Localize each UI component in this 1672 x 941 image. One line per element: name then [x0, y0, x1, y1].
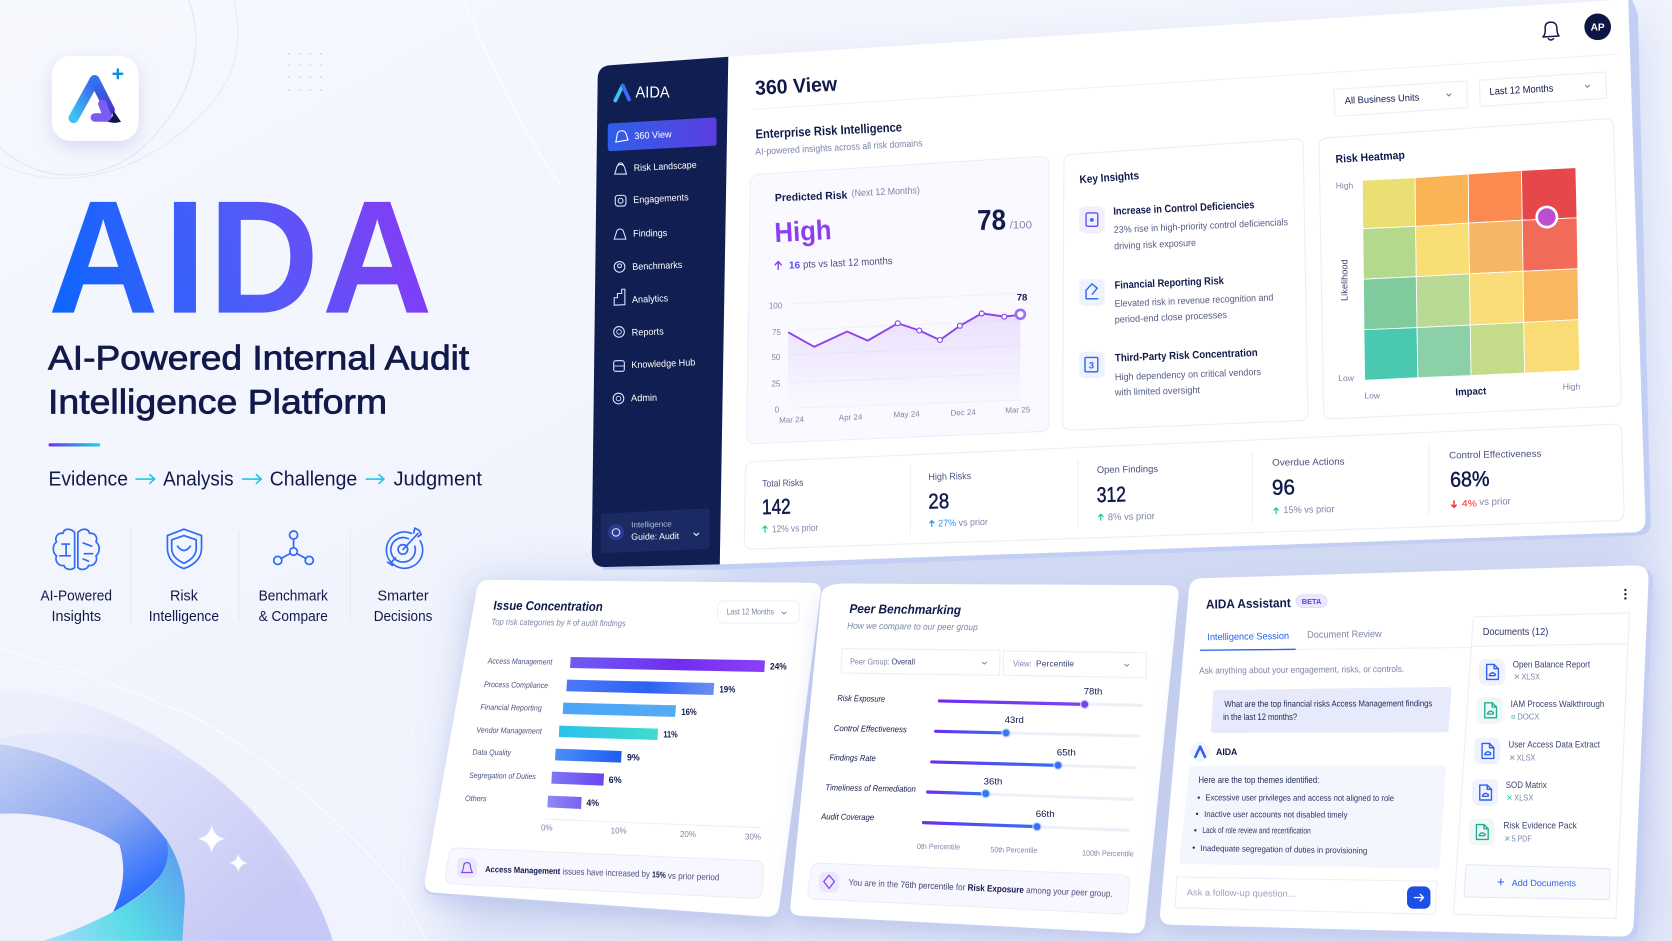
insight 3: High dependency on critical vendors — [1115, 367, 1261, 383]
section heading: AI-powered insights across all risk domains — [755, 138, 923, 158]
doc item 2: DOCX — [1517, 712, 1540, 721]
feature: AI-powered insights: Insights — [51, 609, 101, 625]
section heading — [755, 119, 923, 158]
KPI: high risks: vs prior — [958, 517, 989, 529]
feature: AI-powered insights — [41, 529, 112, 625]
active nav item — [610, 120, 714, 148]
percentile sliders: 78th — [1084, 686, 1102, 697]
percentile sliders: 66th — [1036, 809, 1055, 820]
doc item 3: ✕ — [1509, 753, 1516, 762]
tabs — [1200, 629, 1472, 650]
question input: Ask a follow-up question... — [1187, 887, 1296, 899]
percentile sliders: 100th Percentile — [1082, 849, 1134, 858]
line chart: Mar 25 — [1005, 405, 1031, 415]
percentile sliders: 65th — [1057, 747, 1076, 758]
insight 3: Third-Party Risk Concentration — [1115, 347, 1258, 364]
add documents button — [1464, 865, 1610, 900]
line chart: May 24 — [893, 409, 920, 419]
bar chart: Vendor Management — [476, 726, 542, 736]
dropdown: peer group — [841, 649, 1000, 675]
KPI: high risks: 28 — [928, 489, 949, 514]
bar chart: 30% — [745, 832, 761, 841]
subtitle: Intelligence Platform — [48, 383, 387, 421]
dropdown: period: Last 12 Months — [1489, 83, 1554, 98]
doc item 1: Open Balance Report — [1513, 660, 1591, 670]
bar chart: Access Management — [487, 656, 553, 667]
insight 2 — [1079, 275, 1274, 326]
callout: issues have increased by — [562, 866, 650, 879]
KPI: overdue actions: 15% vs prior — [1283, 504, 1335, 516]
panel: 360 view dashboard — [592, 0, 1651, 570]
line chart: Mar 24 — [779, 415, 805, 425]
documents list: Documents (12) — [1483, 627, 1548, 638]
KPI: high risks: High Risks — [928, 471, 971, 483]
nav items: Analytics — [632, 293, 669, 306]
percentile sliders: Timeliness of Remediation — [825, 782, 916, 794]
AIDA label: AIDA — [1216, 747, 1237, 758]
callout: vs prior period — [668, 871, 720, 882]
percentile sliders: Findings Rate — [829, 752, 876, 763]
card: key insights: Key Insights — [1079, 170, 1140, 186]
assistant answer: Inadequate segregation of duties in provisioning — [1200, 843, 1368, 856]
KPI: high risks: 27% — [938, 518, 957, 529]
icon: bell — [1543, 22, 1559, 40]
KPI: overdue actions: Overdue Actions — [1272, 457, 1345, 469]
sidebar logo — [615, 85, 670, 102]
feature: benchmark and compare: Benchmark — [259, 589, 329, 605]
percentile sliders: 36th — [984, 777, 1002, 788]
card: risk heatmap — [1319, 119, 1621, 419]
KPI: high risks — [928, 471, 989, 529]
beta badge — [1296, 595, 1327, 608]
KPI: overdue actions — [1272, 457, 1345, 516]
percentile sliders: 50th Percentile — [990, 845, 1037, 855]
callout: You are in the 76th percentile for Risk Exposure among your peer group. — [848, 877, 1113, 899]
intelligence guide box: Guide: Audit — [631, 531, 680, 542]
dropdown: view — [1003, 651, 1147, 678]
percentile sliders: Audit Coverage — [820, 811, 874, 822]
line chart: 25 — [771, 379, 781, 388]
nav items: Findings — [633, 228, 668, 240]
doc item 2: ¤ — [1511, 712, 1515, 721]
risk score: 78 — [977, 205, 1006, 237]
panel: issue concentration: Issue Concentration — [493, 598, 603, 614]
dropdown: business units — [1334, 81, 1467, 116]
card: predicted risk: Predicted Risk — [775, 190, 848, 204]
bar chart: 24% — [770, 662, 787, 673]
KPI: open findings: Open Findings — [1097, 464, 1158, 476]
dropdown: peer group: Overall — [891, 656, 915, 666]
assistant answer: Inactive user accounts not disabled timely — [1204, 809, 1348, 820]
risk level: High — [774, 214, 832, 248]
percentile sliders: 0th Percentile — [917, 842, 960, 852]
AIDA label — [1190, 742, 1237, 762]
decorative arcs top-left — [0, 0, 560, 184]
line chart: 75 — [772, 328, 781, 337]
doc item 5 — [1469, 819, 1577, 845]
card: predicted risk: (Next 12 Months) — [851, 185, 920, 199]
nav items — [613, 160, 697, 404]
doc item 5: ✕ — [1504, 834, 1511, 843]
bar chart: Others — [465, 794, 487, 803]
feature: risk intelligence — [149, 529, 219, 625]
active nav item: 360 View — [634, 129, 672, 142]
heatmap grid — [1362, 168, 1580, 380]
line chart: 0 — [775, 406, 780, 415]
bar chart: 4% — [586, 798, 600, 809]
flow: evidence to judgment: Challenge — [270, 468, 357, 490]
heatmap axes: High — [1336, 181, 1354, 191]
percentile sliders: Risk Exposure — [837, 693, 885, 704]
insight 3: with limited oversight — [1114, 385, 1201, 399]
insight 2: Financial Reporting Risk — [1114, 275, 1224, 292]
dropdown — [718, 601, 799, 623]
doc item 3: User Access Data Extract — [1508, 739, 1601, 749]
KPI: control effectiveness — [1449, 449, 1542, 510]
percentile sliders — [820, 686, 1142, 858]
insight 2: Elevated risk in revenue recognition and — [1114, 292, 1274, 310]
bar chart — [465, 656, 787, 841]
sidebar — [592, 57, 728, 567]
feature: benchmark and compare: & Compare — [259, 609, 328, 625]
card: predicted risk — [747, 156, 1049, 444]
percentile sliders: Control Effectiveness — [834, 723, 907, 734]
card: KPI strip — [744, 424, 1624, 549]
doc item 2: IAM Process Walkthrough — [1511, 699, 1605, 709]
callout: 15% — [652, 869, 666, 880]
doc item 4: ✕ — [1506, 794, 1513, 803]
KPI: control effectiveness: Control Effectiveness — [1449, 449, 1542, 461]
bar chart: 20% — [680, 830, 696, 839]
nav items: Admin — [631, 393, 657, 404]
line chart: Dec 24 — [950, 408, 977, 418]
trend — [775, 256, 893, 272]
line chart: Apr 24 — [839, 413, 863, 422]
doc item 3: XLSX — [1517, 753, 1536, 762]
beta badge: BETA — [1302, 597, 1322, 606]
feature: risk intelligence: Intelligence — [149, 609, 219, 625]
nav items: Risk Landscape — [634, 160, 697, 174]
swirl graphic bottom-left — [0, 649, 427, 941]
risk score — [977, 205, 1032, 237]
insight 3 — [1079, 347, 1261, 399]
line chart — [769, 293, 1031, 425]
insight 1: 23% rise in high-priority control deficiencials — [1114, 217, 1288, 236]
avatar — [1584, 13, 1611, 40]
dropdown: period — [1479, 72, 1607, 106]
assistant answer: Excessive user privileges and access not aligned to role — [1205, 792, 1394, 803]
nav items: Benchmarks — [632, 260, 683, 273]
bar chart: 6% — [609, 775, 622, 786]
accent line — [49, 443, 100, 447]
doc item 5: 5 PDF — [1512, 834, 1532, 843]
section heading: Enterprise Risk Intelligence — [755, 119, 902, 141]
insight 2: period-end close processes — [1114, 310, 1227, 326]
KPI: open findings: 8% vs prior — [1108, 511, 1156, 523]
assistant answer: Lack of role review and recertification — [1202, 825, 1311, 836]
sidebar logo: AIDA — [636, 85, 670, 102]
risk score: /100 — [1010, 219, 1032, 231]
intelligence guide box: Intelligence — [631, 519, 672, 530]
panel: peer benchmarking: Peer Benchmarking — [849, 601, 961, 617]
callout: Access Management — [485, 864, 561, 876]
feature: smarter decisions: Smarter — [378, 589, 429, 605]
trend: 16 — [789, 261, 800, 272]
assistant answer: Here are the top themes identified: — [1198, 775, 1319, 785]
bar chart: Process Compliance — [484, 680, 549, 690]
feature: risk intelligence: Risk — [170, 589, 199, 605]
flow: evidence to judgment: Judgment — [393, 468, 482, 490]
flow: evidence to judgment: Evidence — [49, 468, 128, 490]
panel: AIDA assistant: AIDA Assistant — [1206, 595, 1292, 612]
dropdown: business units: All Business Units — [1344, 92, 1420, 107]
tabs: Intelligence Session — [1207, 631, 1289, 643]
callout — [446, 848, 764, 898]
KPI: total risks: 12% vs prior — [772, 523, 819, 535]
add documents button: Add Documents — [1512, 878, 1577, 888]
overflow menu — [1624, 589, 1627, 600]
heatmap axes: Likelihood — [1339, 259, 1350, 301]
bar chart: 11% — [663, 730, 678, 741]
soft shadow band — [448, 22, 1655, 939]
insight 3: 3 — [1089, 361, 1094, 372]
insight 1 — [1079, 199, 1288, 252]
flow: evidence to judgment: Analysis — [163, 468, 234, 490]
dropdown: view: Percentile — [1036, 658, 1074, 668]
KPI: total risks: 142 — [762, 494, 791, 519]
user bubble: in the last 12 months? — [1223, 712, 1297, 722]
bar chart: 10% — [611, 827, 627, 836]
intelligence guide box — [604, 511, 707, 550]
doc item 4 — [1472, 779, 1547, 806]
dropdown: peer group: Peer Group: — [850, 656, 890, 666]
insight 1: driving risk exposure — [1114, 238, 1196, 252]
panel: peer benchmarking: How we compare to our peer group — [847, 621, 978, 632]
heatmap axes: High — [1563, 381, 1580, 391]
line chart: 100 — [769, 301, 783, 310]
line chart: 50 — [771, 353, 781, 362]
KPI: control effectiveness: vs prior — [1479, 496, 1512, 508]
heatmap axes: Low — [1338, 373, 1355, 383]
nav items: Reports — [632, 326, 664, 339]
bar chart: Segregation of Duties — [469, 771, 536, 781]
percentile sliders: 43rd — [1005, 715, 1024, 726]
doc item 1 — [1479, 659, 1591, 685]
user bubble: What are the top financial risks Access Management findings — [1224, 698, 1433, 709]
avatar: AP — [1591, 23, 1605, 34]
bar chart: 16% — [681, 707, 697, 718]
question input — [1175, 877, 1437, 914]
nav items: Knowledge Hub — [631, 357, 696, 371]
dropdown: view: View: — [1013, 658, 1032, 668]
feature dividers — [131, 530, 350, 621]
heading: 360 View: 360 View — [754, 74, 838, 100]
doc item 4: SOD Matrix — [1506, 780, 1547, 790]
KPI: overdue actions: 96 — [1272, 475, 1295, 500]
logo tile — [52, 56, 139, 141]
feature: AI-powered insights: AI-Powered — [41, 589, 112, 605]
panel: AIDA assistant — [1160, 565, 1653, 941]
panel: issue concentration: Top risk categories by # of audit findings — [491, 617, 626, 628]
insight 1: Increase in Control Deficiencies — [1113, 199, 1255, 218]
tabs: Document Review — [1307, 629, 1382, 641]
panel: peer benchmarking — [790, 584, 1179, 936]
feature: smarter decisions — [374, 528, 432, 625]
user bubble — [1213, 690, 1449, 730]
bar chart: Data Quality — [472, 748, 512, 757]
heatmap axes — [1336, 181, 1580, 401]
flow: evidence to judgment — [49, 468, 482, 490]
heatmap axes: Impact — [1455, 386, 1487, 399]
KPI: open findings: 312 — [1096, 482, 1126, 507]
nav items: Engagements — [633, 192, 689, 206]
feature: benchmark and compare — [259, 531, 329, 625]
documents list — [1453, 613, 1629, 919]
doc item 3 — [1474, 738, 1601, 764]
KPI: total risks: Total Risks — [762, 478, 804, 490]
title: AIDA: AIDA — [48, 168, 432, 348]
bar chart: Financial Reporting — [480, 703, 542, 713]
bar chart: 19% — [719, 685, 736, 696]
dotted grid — [288, 53, 322, 91]
line chart: 78 — [1017, 293, 1028, 304]
doc item 4: XLSX — [1514, 794, 1534, 803]
subtitle — [48, 340, 470, 421]
heatmap axes: Low — [1364, 391, 1381, 401]
KPI: control effectiveness: 68% — [1450, 467, 1490, 492]
bar chart: 0% — [541, 823, 553, 832]
callout — [808, 863, 1129, 914]
assistant answer — [1182, 768, 1443, 866]
doc item 2 — [1477, 697, 1605, 724]
dropdown: Last 12 Months — [727, 607, 774, 616]
panel: issue concentration — [424, 580, 821, 918]
doc item 1: ✕ — [1514, 673, 1520, 682]
feature: smarter decisions: Decisions — [374, 609, 432, 625]
subtitle: AI-Powered Internal Audit — [48, 340, 470, 378]
heatmap marker — [1537, 207, 1557, 227]
KPI: control effectiveness: 4% — [1462, 499, 1477, 510]
bar chart: 9% — [627, 753, 640, 764]
doc item 1: XLSX — [1521, 673, 1541, 682]
card: key insights — [1063, 139, 1308, 430]
trend: pts vs last 12 months — [803, 256, 893, 271]
card: risk heatmap: Risk Heatmap — [1335, 150, 1405, 166]
doc item 5: Risk Evidence Pack — [1503, 820, 1577, 830]
KPI: total risks — [762, 478, 819, 535]
KPI: open findings — [1096, 464, 1158, 523]
prompt hint: Ask anything about your engagement, risks, or controls. — [1199, 664, 1404, 676]
